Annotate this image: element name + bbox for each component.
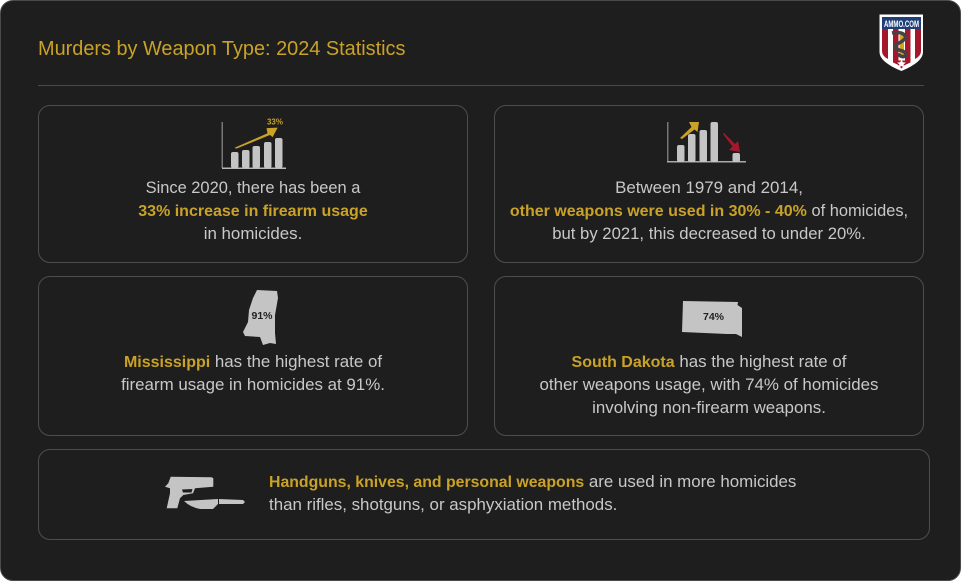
divider line: [38, 85, 924, 86]
title: Murders by Weapon Type: 2024 Statistics: [38, 38, 405, 60]
panel: handguns and knives: [38, 449, 930, 540]
panel: other weapons decline: [494, 105, 924, 263]
panel: South Dakota: [494, 276, 924, 436]
text: South Dakota: involving non-firearm weapons.: [592, 398, 826, 417]
logo: ammo.com shield: AMMO.COM: [884, 19, 919, 30]
text: other weapons decline: but by 2021, this decreased to under 20%.: [552, 224, 866, 243]
text: other weapons decline: [510, 178, 908, 243]
panel: firearm usage increase: [38, 105, 468, 263]
text: South Dakota: South Dakota has the highest rate of: [572, 352, 846, 371]
text: handguns and knives: Handguns, knives, and personal weapons are used in more homicides: [269, 472, 796, 491]
text: Mississippi: Mississippi has the highest rate of: [124, 352, 382, 371]
icon: South Dakota map with 74%: 74%: [703, 311, 725, 323]
text: firearm usage increase: 33% increase in firearm usage: [138, 203, 368, 220]
text: South Dakota: [540, 352, 878, 417]
text: Mississippi: firearm usage in homicides at 91%.: [121, 375, 385, 394]
text: other weapons decline: Between 1979 and 2014,: [615, 178, 803, 197]
text: Mississippi: [121, 352, 385, 394]
text: handguns and knives: than rifles, shotguns, or asphyxiation methods.: [269, 495, 617, 514]
panel: Mississippi: [38, 276, 468, 436]
text: handguns and knives: [269, 472, 796, 514]
text: firearm usage increase: Since 2020, there has been a: [146, 179, 360, 197]
icon: Mississippi map with 91%: 91%: [251, 310, 273, 322]
text: firearm usage increase: [138, 179, 368, 243]
text: other weapons decline: other weapons were used in 30% - 40% of homicides,: [510, 202, 908, 220]
text: firearm usage increase: in homicides.: [204, 224, 302, 243]
text: South Dakota: other weapons usage, with 74% of homicides: [540, 375, 878, 394]
icon: rising bar chart with 33%: 33%: [267, 118, 283, 126]
